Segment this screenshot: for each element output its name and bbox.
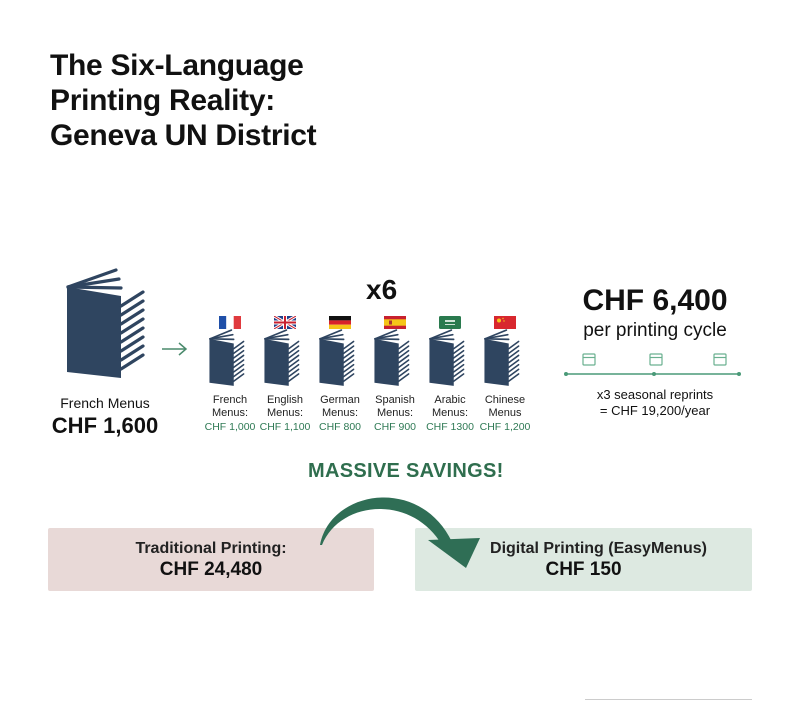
panel: traditional printing: CHF 24,480 bbox=[160, 559, 262, 580]
panel: six language books: Menus bbox=[488, 407, 522, 419]
panel: six language books: CHF 1300 bbox=[426, 421, 474, 433]
label: French Menus total bbox=[52, 395, 158, 438]
labels: language costs: French bbox=[213, 394, 247, 406]
labels: language costs: CHF 1,000 bbox=[205, 421, 255, 433]
panel: digital printing bbox=[415, 528, 752, 591]
arrow: savings curve bbox=[320, 498, 480, 568]
title: Geneva UN District bbox=[50, 119, 316, 152]
heading: x6: x6 bbox=[366, 274, 397, 305]
panel: six language books: German bbox=[320, 394, 360, 406]
label: French Menus total: French Menus bbox=[60, 395, 150, 411]
flag: Spain bbox=[384, 316, 406, 329]
panel: per cycle cost bbox=[564, 284, 741, 418]
flag: UK bbox=[274, 316, 296, 329]
panel: digital printing: CHF 150 bbox=[545, 559, 622, 580]
labels: language costs: Menus: bbox=[212, 407, 248, 419]
text: seasonal reprints: = CHF 19,200/year bbox=[600, 403, 710, 418]
panel: six language books: CHF 1,200 bbox=[480, 421, 530, 433]
icon: big book bbox=[66, 268, 145, 378]
flag: Saudi Arabia bbox=[439, 316, 461, 329]
panel: six language books: English bbox=[267, 394, 303, 406]
panel: six language books: CHF 900 bbox=[374, 421, 416, 433]
flag: China bbox=[494, 316, 516, 329]
panel: six language books: CHF 1,100 bbox=[260, 421, 310, 433]
panel: six language books: Arabic bbox=[434, 394, 466, 406]
flag: Germany bbox=[329, 316, 351, 329]
panel: digital printing: Digital Printing (EasyMenus) bbox=[490, 540, 707, 557]
panel: six language books: CHF 800 bbox=[319, 421, 361, 433]
title: The Six-Language bbox=[50, 49, 304, 82]
panel: six language books: Menus: bbox=[377, 407, 413, 419]
heading: CHF 6,400: CHF 6,400 bbox=[582, 284, 728, 317]
text: seasonal reprints: x3 seasonal reprints bbox=[597, 387, 713, 402]
title bbox=[50, 49, 316, 152]
labels: language costs bbox=[205, 394, 255, 433]
text: seasonal reprints bbox=[597, 387, 713, 418]
timeline with calendars bbox=[564, 353, 741, 376]
label: French Menus total: CHF 1,600 bbox=[52, 413, 158, 438]
panel: six language books: Menus: bbox=[322, 407, 358, 419]
panel: six language books: Menus: bbox=[432, 407, 468, 419]
panel: traditional printing: Traditional Printing: bbox=[135, 540, 287, 557]
panel: six language books: Menus: bbox=[267, 407, 303, 419]
panel: six language books: Spanish bbox=[375, 394, 415, 406]
panel: six language books bbox=[205, 316, 530, 433]
heading: massive savings: MASSIVE SAVINGS! bbox=[308, 460, 504, 482]
panel: traditional printing bbox=[48, 528, 374, 591]
text: per printing cycle: per printing cycle bbox=[583, 320, 727, 341]
arrow: to languages bbox=[162, 342, 187, 356]
flag: France bbox=[219, 316, 241, 329]
decorative bottom line bbox=[585, 699, 752, 700]
panel: six language books: Chinese bbox=[485, 394, 525, 406]
icons: six books bbox=[209, 329, 244, 386]
title: Printing Reality: bbox=[50, 84, 275, 117]
